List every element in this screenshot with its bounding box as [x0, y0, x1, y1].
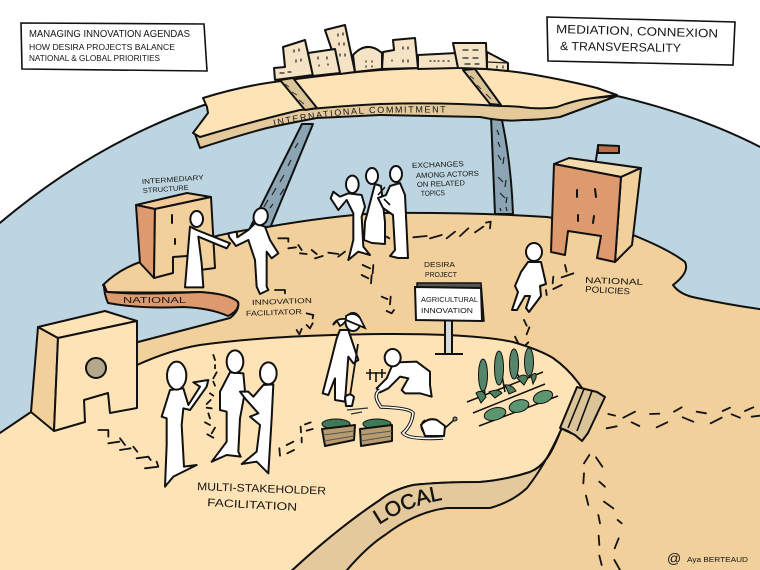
- label: international commitment: INTERNATIONAL COMMITMENT: [274, 106, 446, 126]
- label: innovation facilitator: [246, 296, 312, 318]
- figure: walker: [512, 243, 546, 312]
- national band: [104, 285, 238, 316]
- city skyline: [274, 25, 508, 80]
- label: national policies: NATIONAL: [585, 275, 644, 287]
- label: desira project: PROJECT: [425, 270, 457, 279]
- label: exchanges among actors: EXCHANGES: [412, 159, 464, 170]
- person right: [240, 384, 273, 473]
- globe: blue sky background: [0, 95, 760, 440]
- figure: farmer with spade: [323, 313, 368, 414]
- label: desira project: DESIRA: [424, 260, 455, 269]
- label: multi-stakeholder facilitation: MULTI-STAKEHOLDER: [197, 481, 326, 498]
- figure: exchanges group: [331, 166, 408, 260]
- title box: mediation, connexion and transversality: & TRANSVERSALITY: [560, 39, 681, 55]
- signature: [667, 550, 749, 566]
- person middle: [212, 372, 245, 462]
- label: multi-stakeholder facilitation: [197, 481, 326, 514]
- local band: [291, 431, 561, 570]
- island band: [195, 96, 617, 148]
- building: local structure: [31, 311, 137, 431]
- label: intermediary structure: INTERMEDIARY: [142, 175, 204, 186]
- right pillar: [491, 116, 513, 214]
- floating island: international commitment: [192, 69, 618, 149]
- title box: mediation, connexion and transversality: [547, 17, 735, 65]
- island road right: [463, 69, 501, 105]
- national land: [0, 213, 760, 570]
- building: intermediary structure: [136, 193, 215, 278]
- title box: managing innovation agendas: [21, 23, 207, 71]
- label: exchanges among actors: TOPICS: [421, 188, 445, 198]
- label: innovation facilitator: INNOVATION: [252, 296, 312, 307]
- title box: managing innovation agendas: NATIONAL & GLOBAL PRIORITIES: [29, 54, 160, 63]
- title box: mediation, connexion and transversality: MEDIATION, CONNEXION: [556, 22, 718, 41]
- left pillar: [250, 124, 313, 228]
- signature: Aya BERTEAUD: [687, 555, 749, 564]
- label: intermediary structure: STRUCTURE: [143, 185, 189, 195]
- label: local: LOCAL: [372, 486, 442, 524]
- crates of vegetables: [322, 419, 392, 446]
- vegetable garden rows: [467, 348, 558, 426]
- title box: managing innovation agendas: HOW DESIRA PROJECTS BALANCE: [29, 43, 175, 52]
- label: exchanges among actors: [412, 159, 479, 198]
- label: intermediary structure: [142, 175, 204, 195]
- sign: agricultural innovation: [415, 283, 484, 354]
- figure: handshake pair: [185, 206, 278, 294]
- island road left: [280, 78, 317, 110]
- label: desira project: [424, 260, 457, 279]
- sign: agricultural innovation: INNOVATION: [421, 306, 473, 315]
- label: innovation facilitator: FACILITATOR: [246, 307, 302, 318]
- watering can: [421, 417, 457, 436]
- title box: managing innovation agendas: MANAGING INNOVATION AGENDAS: [29, 29, 190, 40]
- flag: [595, 146, 598, 167]
- island top: [193, 68, 617, 137]
- irrigation device and hose: [366, 369, 443, 438]
- label: national policies: POLICIES: [585, 284, 631, 296]
- footprints: dashed trails: [98, 222, 760, 570]
- label: national: NATIONAL: [123, 295, 186, 305]
- label: national policies: [585, 275, 644, 296]
- building: national policies: [551, 145, 641, 262]
- label: multi-stakeholder facilitation: FACILITATION: [207, 497, 297, 514]
- person left: [162, 380, 208, 487]
- gate at edge of local land: [560, 387, 605, 441]
- label: exchanges among actors: AMONG ACTORS: [416, 169, 479, 180]
- label: exchanges among actors: ON RELATED: [417, 178, 465, 189]
- sign: agricultural innovation: AGRICULTURAL: [421, 295, 478, 304]
- local land: [0, 334, 582, 570]
- signature: @: [667, 550, 681, 566]
- figures: multi-stakeholder group: [162, 350, 277, 487]
- figure: kneeling person: [377, 349, 432, 397]
